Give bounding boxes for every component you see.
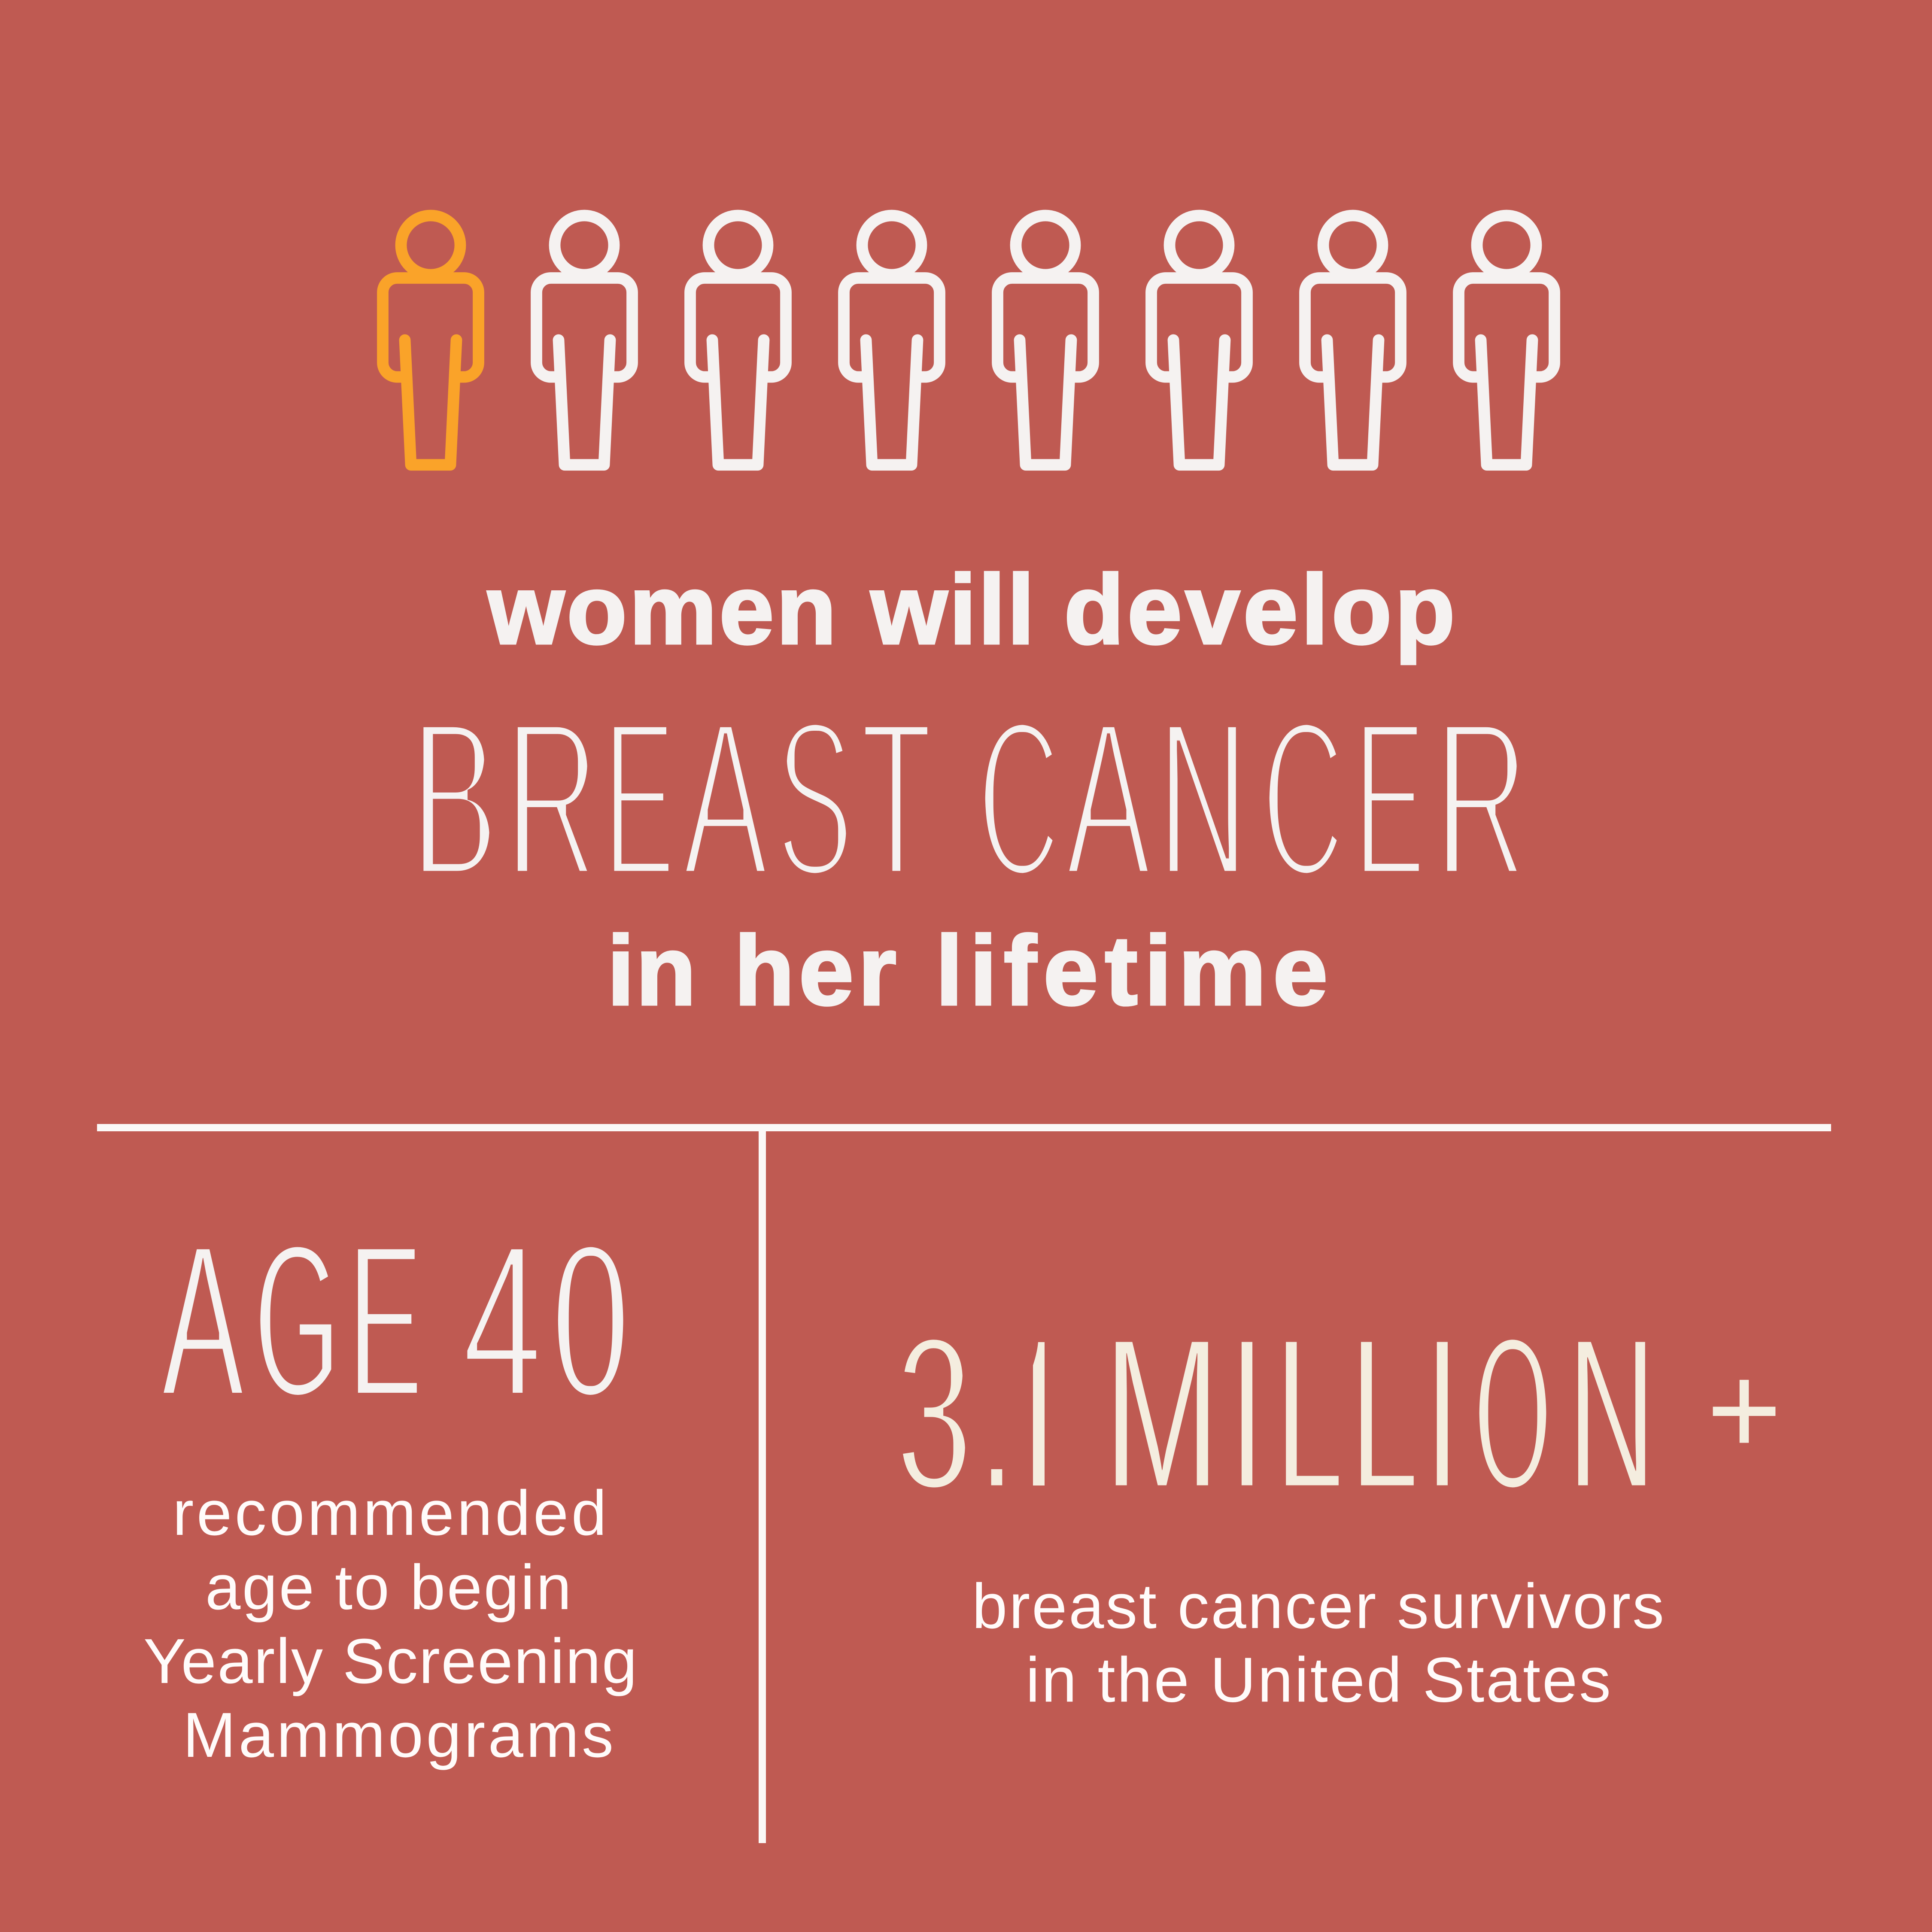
icon: person 3: [690, 216, 786, 465]
heading: breast cancer: C: [978, 674, 1060, 923]
text block: recommended age: Mammograms: [183, 1700, 614, 1771]
text block: recommended age: [143, 1478, 637, 1771]
stat word: AGE: GE: [255, 1199, 422, 1443]
plus sign: +: [1707, 1337, 1782, 1482]
pictogram row: one in eight women: [383, 216, 1554, 465]
heading: women will develop: develop: [1064, 554, 1458, 665]
heading: breast cancer: E: [1355, 674, 1425, 923]
heading: breast cancer: B: [412, 674, 498, 923]
heading: breast cancer: ST: [777, 674, 931, 923]
stat word: AGE: [161, 1199, 422, 1443]
stat number: 3.1 MILLION: 3: [897, 1291, 971, 1536]
icon: person 4: [844, 216, 939, 465]
stat: age 40: [161, 1198, 629, 1443]
stat: 3.1 million: [897, 1291, 1782, 1536]
icon: person 8: [1459, 216, 1554, 465]
heading: in her lifetime: in: [607, 915, 697, 1026]
text block: recommended age: age to begin: [205, 1552, 571, 1623]
heading: breast cancer: R: [1436, 674, 1528, 923]
heading: breast cancer: R: [506, 674, 598, 923]
stat word: AGE: A: [161, 1199, 245, 1443]
heading: breast cancer: A: [1066, 674, 1152, 923]
divider: vertical: [759, 1131, 766, 1843]
heading: in her lifetime: lifetime: [936, 915, 1334, 1026]
icon: person 2: [537, 216, 632, 465]
text block: survivors: [972, 1571, 1664, 1716]
heading: women will develop: women: [487, 554, 838, 665]
text block: survivors: in the United States: [1026, 1644, 1611, 1716]
text block: recommended age: Yearly Screening: [143, 1626, 637, 1697]
heading: breast cancer: C: [1262, 674, 1345, 923]
stat number: 3.1 MILLION: N: [1568, 1291, 1655, 1536]
heading: breast cancer: A: [683, 674, 769, 923]
heading: in her lifetime: her: [734, 915, 901, 1026]
text block: recommended age: recommended: [173, 1478, 607, 1549]
stat number: 3.1 MILLION: O: [1474, 1291, 1551, 1536]
text block: survivors: breast cancer survivors: [972, 1571, 1664, 1642]
stat number: 3.1 MILLION: .1: [980, 1291, 1068, 1536]
stat number: 3.1 MILLION: ILLI: [1230, 1291, 1459, 1536]
divider: horizontal: [97, 1124, 1831, 1131]
stat number: 40: 40: [463, 1198, 629, 1443]
heading: breast cancer: E: [605, 674, 674, 923]
heading: breast cancer: [412, 674, 1528, 923]
icon: person 7: [1305, 216, 1400, 465]
icon: person 6: [1151, 216, 1247, 465]
heading: women will develop: will: [870, 554, 1036, 665]
stat number: 3.1 MILLION: M: [1104, 1291, 1220, 1536]
icon: highlighted person: [383, 216, 478, 465]
numeral 1 clean-up: hide serif foot and flag, redraw plain stem with short flag: [1005, 1337, 1071, 1492]
icon: person 5: [998, 216, 1093, 465]
stat number: 3.1 MILLION: [897, 1291, 1655, 1536]
heading: breast cancer: N: [1158, 674, 1247, 923]
